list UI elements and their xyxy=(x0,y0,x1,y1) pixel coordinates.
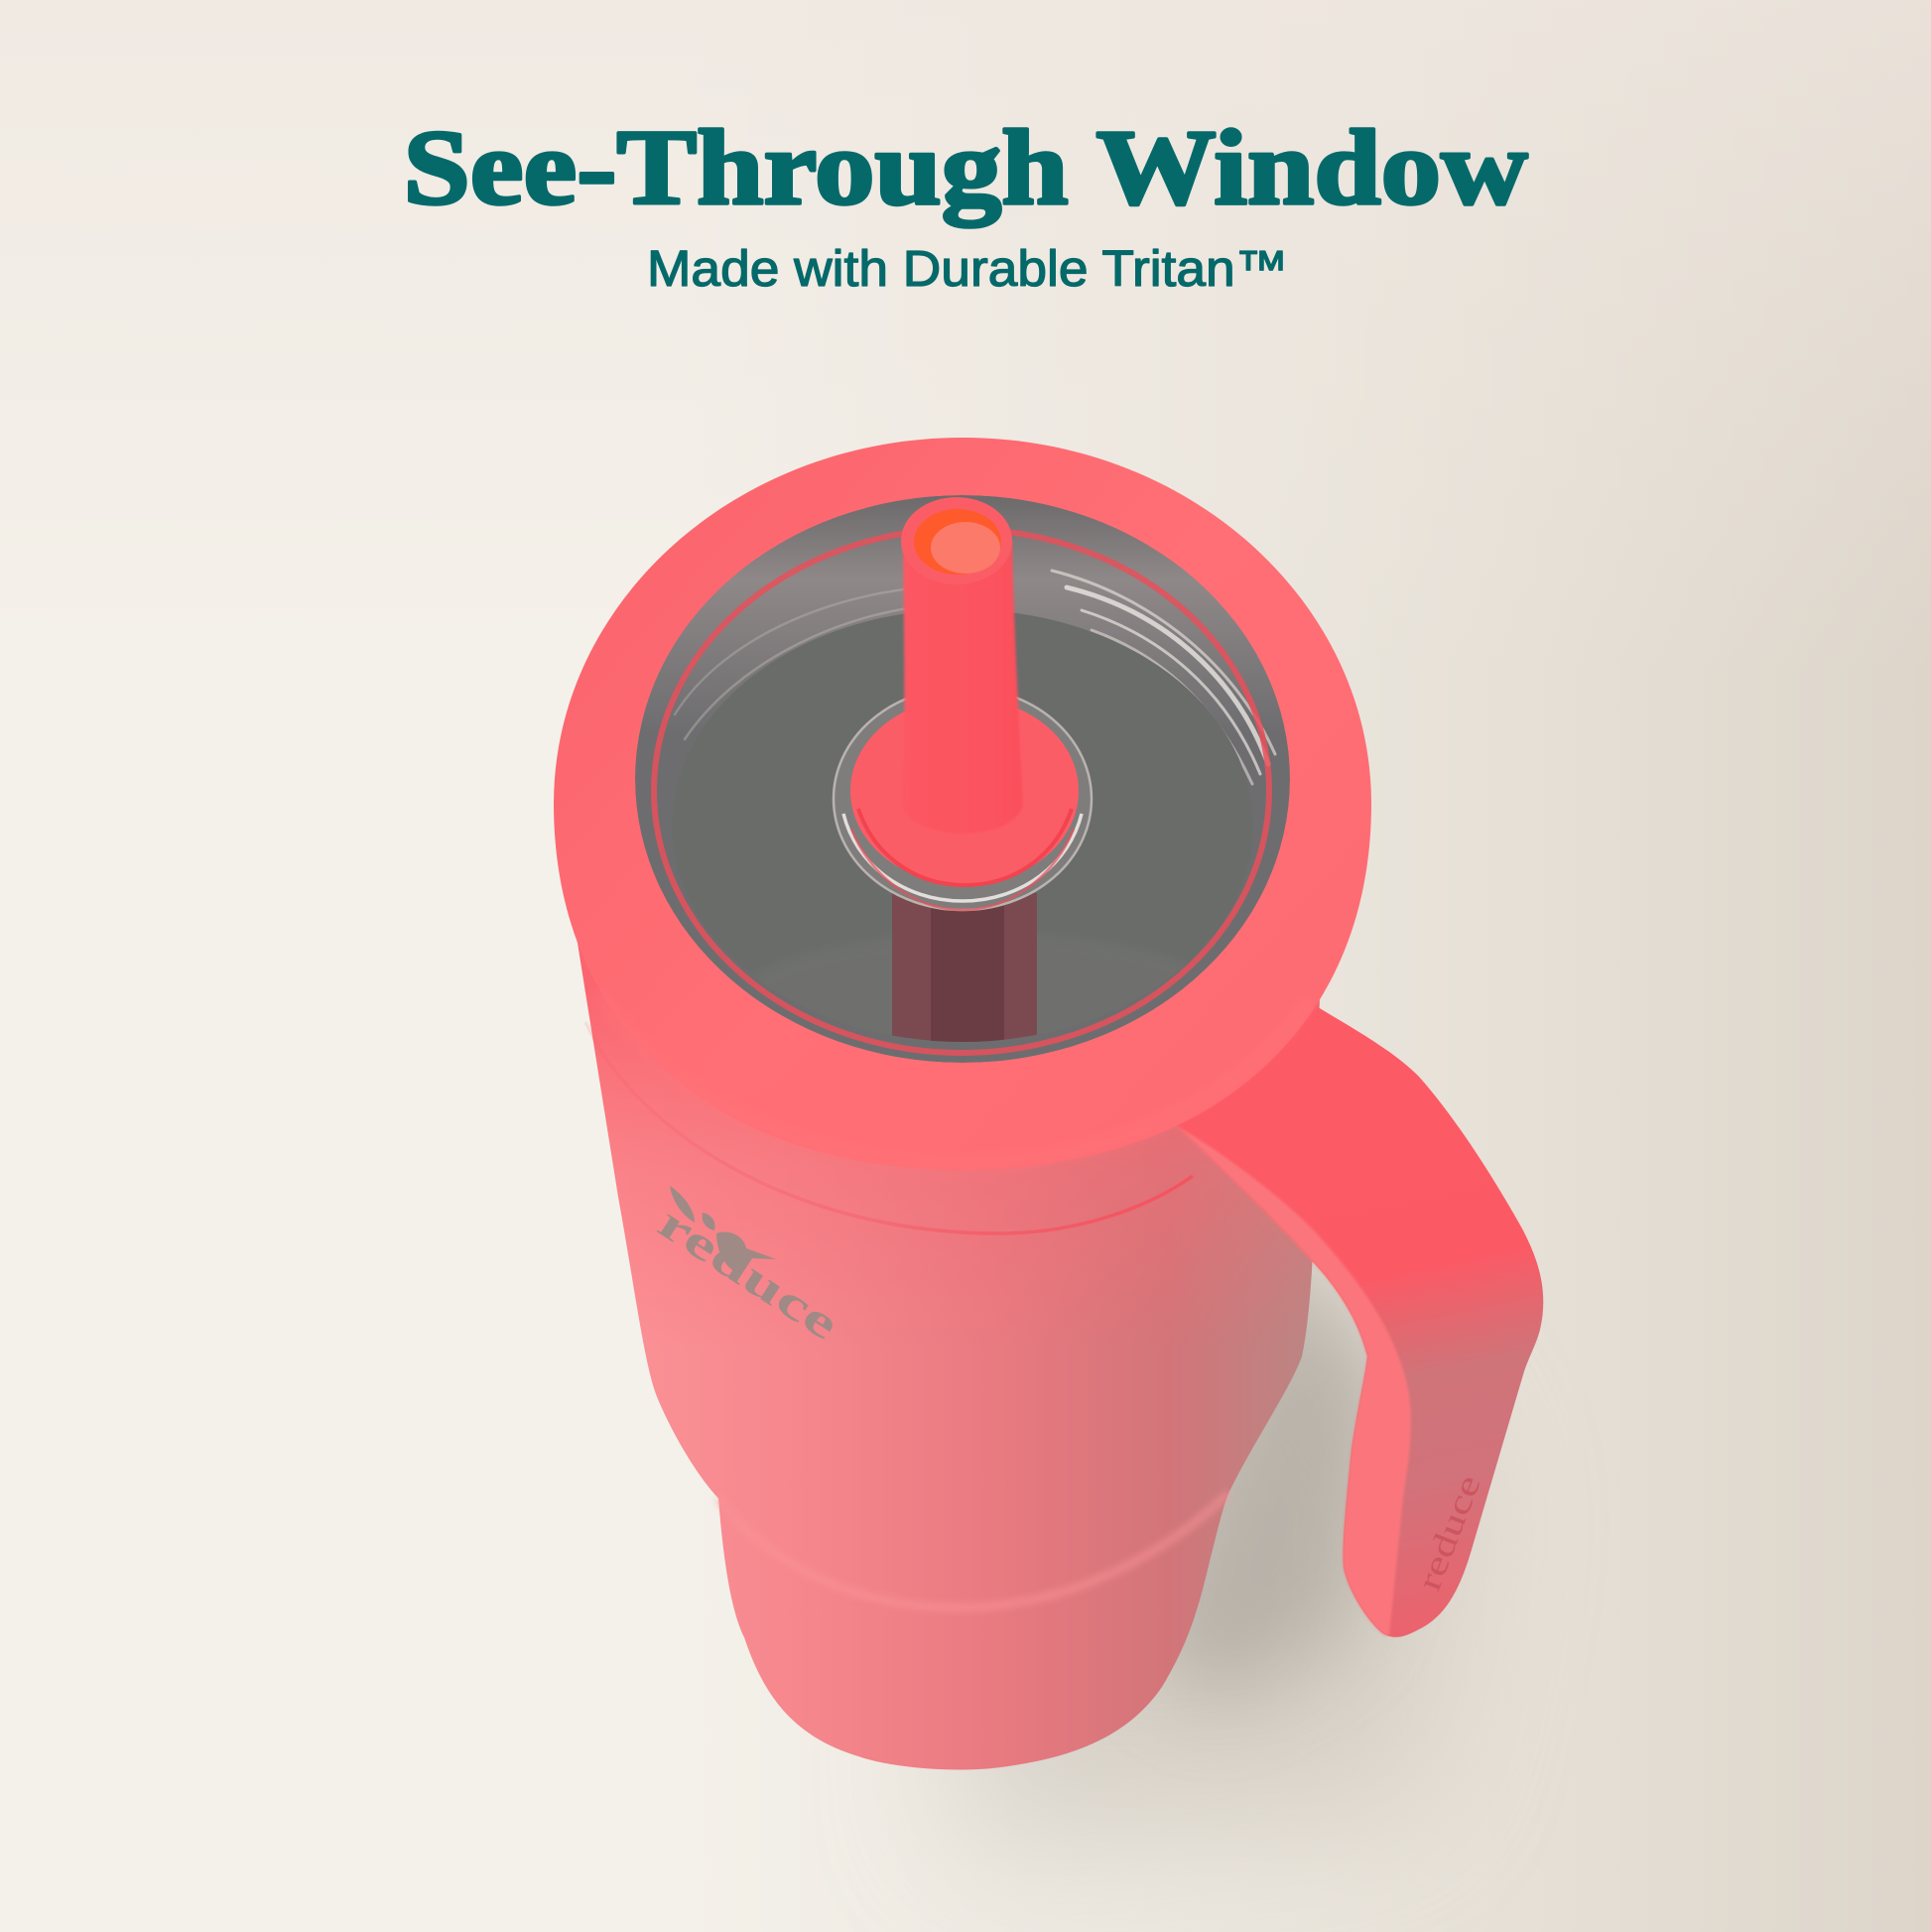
tumbler xyxy=(554,438,1543,1770)
title: See-Through Window xyxy=(403,109,1528,227)
handle xyxy=(1176,1004,1543,1637)
logo: reduce on body xyxy=(650,1186,847,1350)
window glass xyxy=(635,495,1290,1063)
tumbler body xyxy=(570,893,1320,1770)
handle wordmark: reduce xyxy=(1411,1471,1488,1596)
lid rim xyxy=(554,438,1371,1170)
straw opening xyxy=(914,509,1001,575)
handle inner face xyxy=(1176,1125,1411,1635)
straw mouth xyxy=(901,497,1012,584)
window floor xyxy=(712,613,1242,1042)
silicone disc xyxy=(850,698,1079,884)
tumbler shadow xyxy=(953,1141,1469,1846)
thread ridges xyxy=(675,571,1275,784)
infographic canvas xyxy=(407,0,1931,1932)
lower groove xyxy=(718,1493,1228,1608)
straw reflection xyxy=(892,893,1037,1052)
see-through window xyxy=(635,495,1290,1072)
window red gasket xyxy=(654,529,1269,1053)
logo wordmark: reduce xyxy=(650,1197,847,1350)
straw seat xyxy=(834,688,1092,910)
subtitle: Made with Durable Tritan™ xyxy=(647,240,1288,297)
neck seam xyxy=(585,1022,1193,1233)
glass collar xyxy=(834,688,1092,910)
logo leaves and bird xyxy=(670,1186,776,1270)
straw xyxy=(901,497,1023,834)
